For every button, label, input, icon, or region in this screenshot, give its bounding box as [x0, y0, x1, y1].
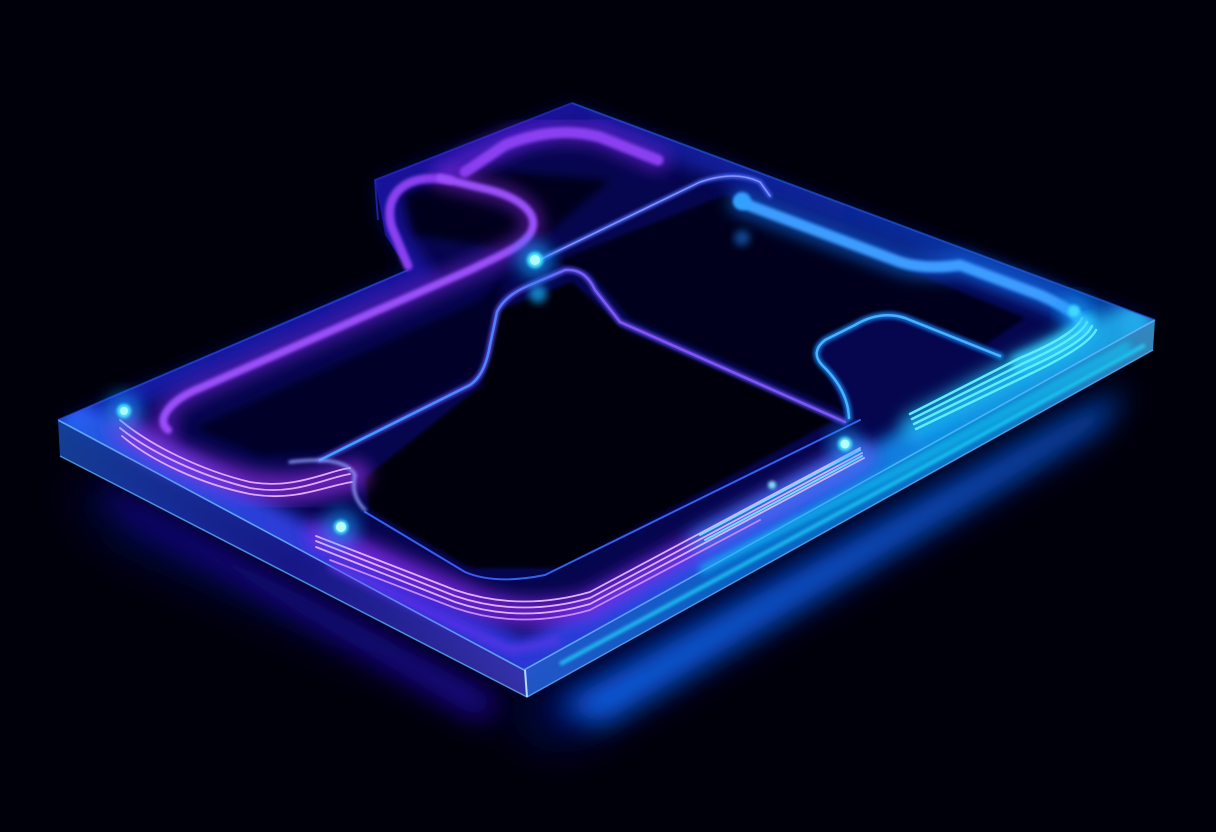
channel: inner frame line: [365, 420, 860, 579]
channel: cyan parallel lines at right: [910, 318, 1096, 429]
channels: fluid circuit: [120, 132, 1096, 620]
channel: right small loop: [817, 315, 1000, 418]
node: center: [517, 242, 553, 303]
central dark window panels: [195, 275, 505, 456]
plate right side face: [524, 320, 1155, 697]
upper rim glow on top face: [58, 103, 1155, 420]
cyan light strip on right side: [560, 345, 1145, 664]
plate top face: [58, 103, 1155, 670]
channel: thin blue top line: [535, 176, 770, 262]
cyan strip on inner right rim: [700, 345, 1130, 570]
glowing nodes: [106, 192, 1089, 545]
node: right: [1059, 296, 1089, 326]
top face edge highlights: [58, 320, 1155, 670]
floor glow under the plate: [70, 385, 1130, 735]
plate glow halo: [58, 103, 1155, 688]
channel: lower left serpentine bundle: [120, 420, 365, 510]
node: front left: [323, 509, 359, 545]
channel: thin central peak line: [320, 270, 845, 460]
channel: lower front bundle: [316, 448, 864, 620]
purple strip on front-left rim: [330, 565, 560, 650]
node: small front: [768, 481, 776, 489]
channel: purple upper loop: [163, 132, 658, 430]
plate: acrylic chip body: [58, 103, 1155, 697]
node: front right: [829, 428, 861, 460]
node: left: [106, 393, 142, 429]
lower rim glow on top face: [58, 320, 1155, 670]
channel: blue upper right wide channel: [740, 202, 1085, 330]
bottom edge line: [60, 350, 1153, 697]
plate left side face: [58, 420, 527, 697]
node: top inlet: [733, 192, 751, 246]
